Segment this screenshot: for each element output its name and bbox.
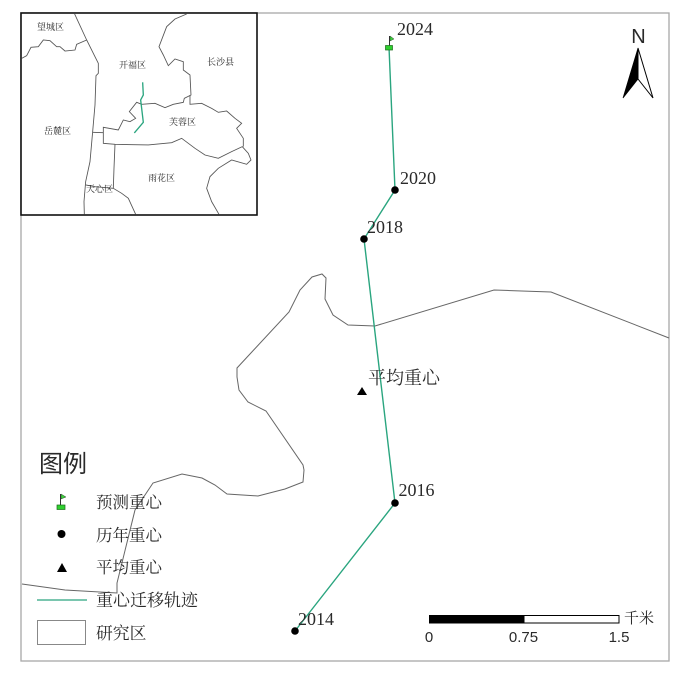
legend: mean: 平均重心 (96, 558, 162, 577)
inset district labels: 望城区 (37, 21, 64, 32)
legend: study area (38, 620, 147, 644)
inset trajectory (134, 82, 143, 133)
inset district labels: 长沙县 (207, 56, 234, 67)
year labels: 2024 (397, 19, 433, 39)
year labels: 2014 (298, 609, 334, 629)
legend: mean (57, 558, 162, 577)
inset district labels: 天心区 (86, 183, 113, 194)
study area boundary (22, 274, 669, 593)
mean centroid label: 平均重心 (368, 368, 441, 388)
scale bar: 0 (425, 629, 433, 646)
yearly centroid points (291, 186, 399, 635)
migration trajectory (295, 47, 395, 631)
legend: study area: 研究区 (96, 624, 147, 643)
legend: yearly: 历年重心 (96, 525, 162, 545)
year labels: 2018 (367, 217, 403, 237)
year labels: 2016 (398, 480, 434, 500)
year labels: 2020 (400, 168, 436, 188)
inset district labels: 雨花区 (148, 172, 175, 183)
inset boundaries (22, 13, 251, 214)
scale bar (425, 610, 654, 646)
inset map (21, 13, 257, 215)
legend: trajectory: 重心迁移轨迹 (96, 591, 199, 610)
north arrow (623, 26, 653, 98)
predicted centroid flag (386, 36, 394, 50)
scale bar: 千米 (624, 610, 654, 627)
year labels (298, 19, 436, 629)
inset district labels: 开福区 (119, 59, 146, 70)
legend: predicted: 预测重心 (96, 493, 162, 512)
scale bar: 1.5 (609, 629, 629, 646)
north arrow: N (631, 26, 646, 48)
mean centroid triangle (357, 387, 367, 395)
inset district labels (37, 21, 234, 194)
inset district labels: 岳麓区 (44, 125, 71, 136)
scale bar: 0.75 (509, 629, 538, 646)
legend: predicted (57, 493, 162, 512)
legend (37, 444, 199, 644)
legend: yearly (58, 525, 162, 545)
inset district labels: 芙蓉区 (169, 116, 196, 127)
legend title: 图例 (39, 444, 87, 479)
